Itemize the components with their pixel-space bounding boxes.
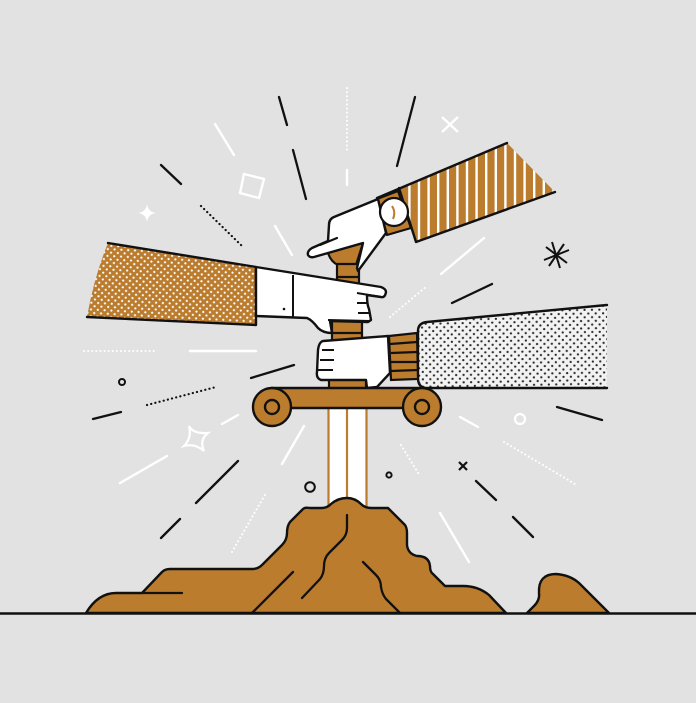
icon: tiny black circle <box>386 472 392 478</box>
sword blade <box>328 406 367 508</box>
icon: black asterisk <box>544 242 569 268</box>
white burst rays <box>120 124 484 562</box>
icon: black circle <box>305 482 315 492</box>
ground line <box>0 612 696 615</box>
sleeve button <box>283 308 285 310</box>
small rock <box>527 574 609 613</box>
top arm <box>308 140 555 271</box>
rock crack lines <box>142 515 400 613</box>
hand pointing right <box>256 267 386 333</box>
black burst rays <box>93 97 602 538</box>
icon: white sparkle <box>138 204 156 222</box>
wristwatch <box>380 198 408 226</box>
dotted sleeve <box>418 305 607 388</box>
right arm <box>317 305 607 388</box>
sleeve edges <box>418 305 607 388</box>
icon: white cross <box>442 117 458 132</box>
hand pointing left <box>308 199 386 271</box>
finger crease <box>320 238 337 245</box>
icon: white circle <box>515 414 525 424</box>
icon: black cross <box>459 462 467 470</box>
fist <box>317 336 390 388</box>
icon: small black circle <box>119 379 125 385</box>
decorative shapes <box>119 117 569 492</box>
sword pommel and grip <box>328 243 366 390</box>
finger lines <box>293 275 381 321</box>
striped sleeve <box>377 140 555 250</box>
icon: white square <box>240 174 264 198</box>
left arm <box>87 243 386 333</box>
cuff <box>377 191 411 235</box>
illustration: three hands gripping a sword in a stone <box>0 87 696 615</box>
icon: sparkle outline <box>184 426 208 451</box>
sleeve edges <box>87 243 256 325</box>
dotted sleeve <box>87 243 256 325</box>
main rock mound <box>86 498 506 613</box>
striped cuff <box>389 333 418 380</box>
finger lines <box>318 350 334 370</box>
sword crossguard <box>253 388 441 426</box>
dotted rays <box>84 88 575 552</box>
